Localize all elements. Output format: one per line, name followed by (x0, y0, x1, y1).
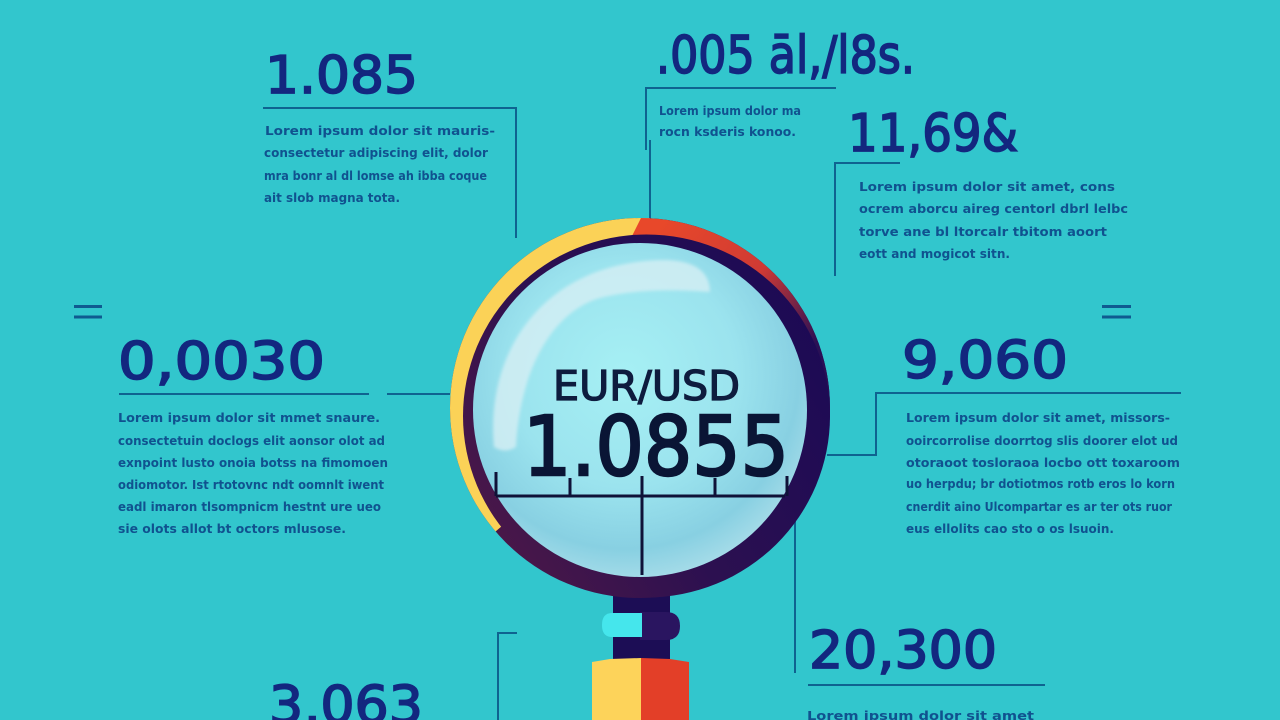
text block: rocn ksderis konoo. (659, 125, 796, 139)
text block: torve ane bl ltorcalr tbitom aoort (859, 225, 1107, 239)
text block: consectetur adipiscing elit, dolor (264, 146, 488, 160)
text block: otoraoot tosloraoa locbo ott toxaroom (906, 456, 1180, 470)
text block: Lorem ipsum dolor sit mauris- (265, 124, 495, 138)
heading: 0,0030: 0,0030 (118, 332, 325, 392)
magnifier collar right (640, 612, 680, 640)
text block: consectetuin doclogs elit aonsor olot ad (118, 434, 385, 448)
leader line (794, 520, 796, 673)
text block (118, 411, 388, 536)
leader line (827, 393, 1181, 455)
text block (906, 411, 1180, 536)
leader line (119, 393, 450, 395)
heading: 9,060: 9,060 (902, 331, 1068, 391)
leader line (646, 88, 836, 220)
dark inner ring (463, 234, 830, 598)
panel: top right stat (835, 104, 1128, 276)
handle red half (641, 658, 689, 720)
panel: top left stat (263, 46, 516, 238)
heading: 1.085: 1.085 (265, 46, 418, 106)
text block: ait slob magna tota. (264, 191, 400, 205)
divider (808, 684, 1045, 686)
text block: Lorem ipsum dolor sit amet, missors- (906, 411, 1170, 425)
lens value: 1.0855: 1.0855 (523, 400, 789, 495)
text block: eadl imaron tlsompnicm hestnt ure ueo (118, 500, 381, 514)
text block (659, 104, 801, 139)
text block: sie olots allot bt octors mlusose. (118, 522, 346, 536)
heading: .005: .005 āl,/l8s. (656, 26, 915, 86)
text block: ocrem aborcu aireg centorl dbrl lelbc (859, 202, 1128, 216)
icon: right equals marks (1102, 306, 1131, 317)
magnifier neck (613, 590, 670, 662)
heading: 11,69&: 11,69& (848, 104, 1018, 164)
panel: bottom right stat (795, 520, 1045, 720)
text block: exnpoint lusto onoia botss na fimomoen (118, 456, 388, 470)
icon: magnifying glass (450, 218, 830, 720)
text block: eott and mogicot sitn. (859, 247, 1010, 261)
panel: middle right stat (827, 331, 1181, 536)
text block: uo herpdu; br dotiotmos rotb eros lo korn (906, 477, 1175, 491)
panel: middle left stat (118, 332, 450, 536)
heading: 20,300: 20,300 (809, 621, 997, 681)
text block (859, 180, 1128, 261)
icon: left equals marks (74, 306, 102, 317)
text block: cnerdit aino Ulcompartar es ar ter ots ruor (906, 500, 1172, 514)
text block: Lorem ipsum dolor sit mmet snaure. (118, 411, 380, 425)
lens label: EUR/USD: EUR/USD (553, 362, 740, 410)
leader line (835, 163, 900, 276)
outer ring base (450, 218, 830, 598)
lens highlight (493, 260, 710, 450)
scale ruler (496, 472, 787, 575)
text block (264, 124, 495, 205)
lens (473, 243, 807, 577)
panel: top centre stat (646, 26, 915, 220)
handle yellow half (592, 658, 641, 720)
text block: mra bonr al dl lomse ah ibba coque (264, 169, 487, 183)
text block: Lorem ipsum dolor sit amet, cons (859, 180, 1115, 194)
leader line (263, 108, 516, 238)
leader line (498, 633, 517, 720)
outer ring yellow arc (450, 218, 650, 532)
text block: eus ellolits cao sto o os lsuoin. (906, 522, 1114, 536)
text block: ooircorrolise doorrtog slis doorer elot ud (906, 434, 1178, 448)
text block: odiomotor. Ist rtotovnc ndt oomnlt iwent (118, 478, 384, 492)
magnifier collar left (602, 613, 642, 637)
panel: bottom left stat (269, 633, 517, 720)
text block: Lorem ipsum dolor ma (659, 104, 801, 118)
outer ring red arc (632, 218, 830, 406)
